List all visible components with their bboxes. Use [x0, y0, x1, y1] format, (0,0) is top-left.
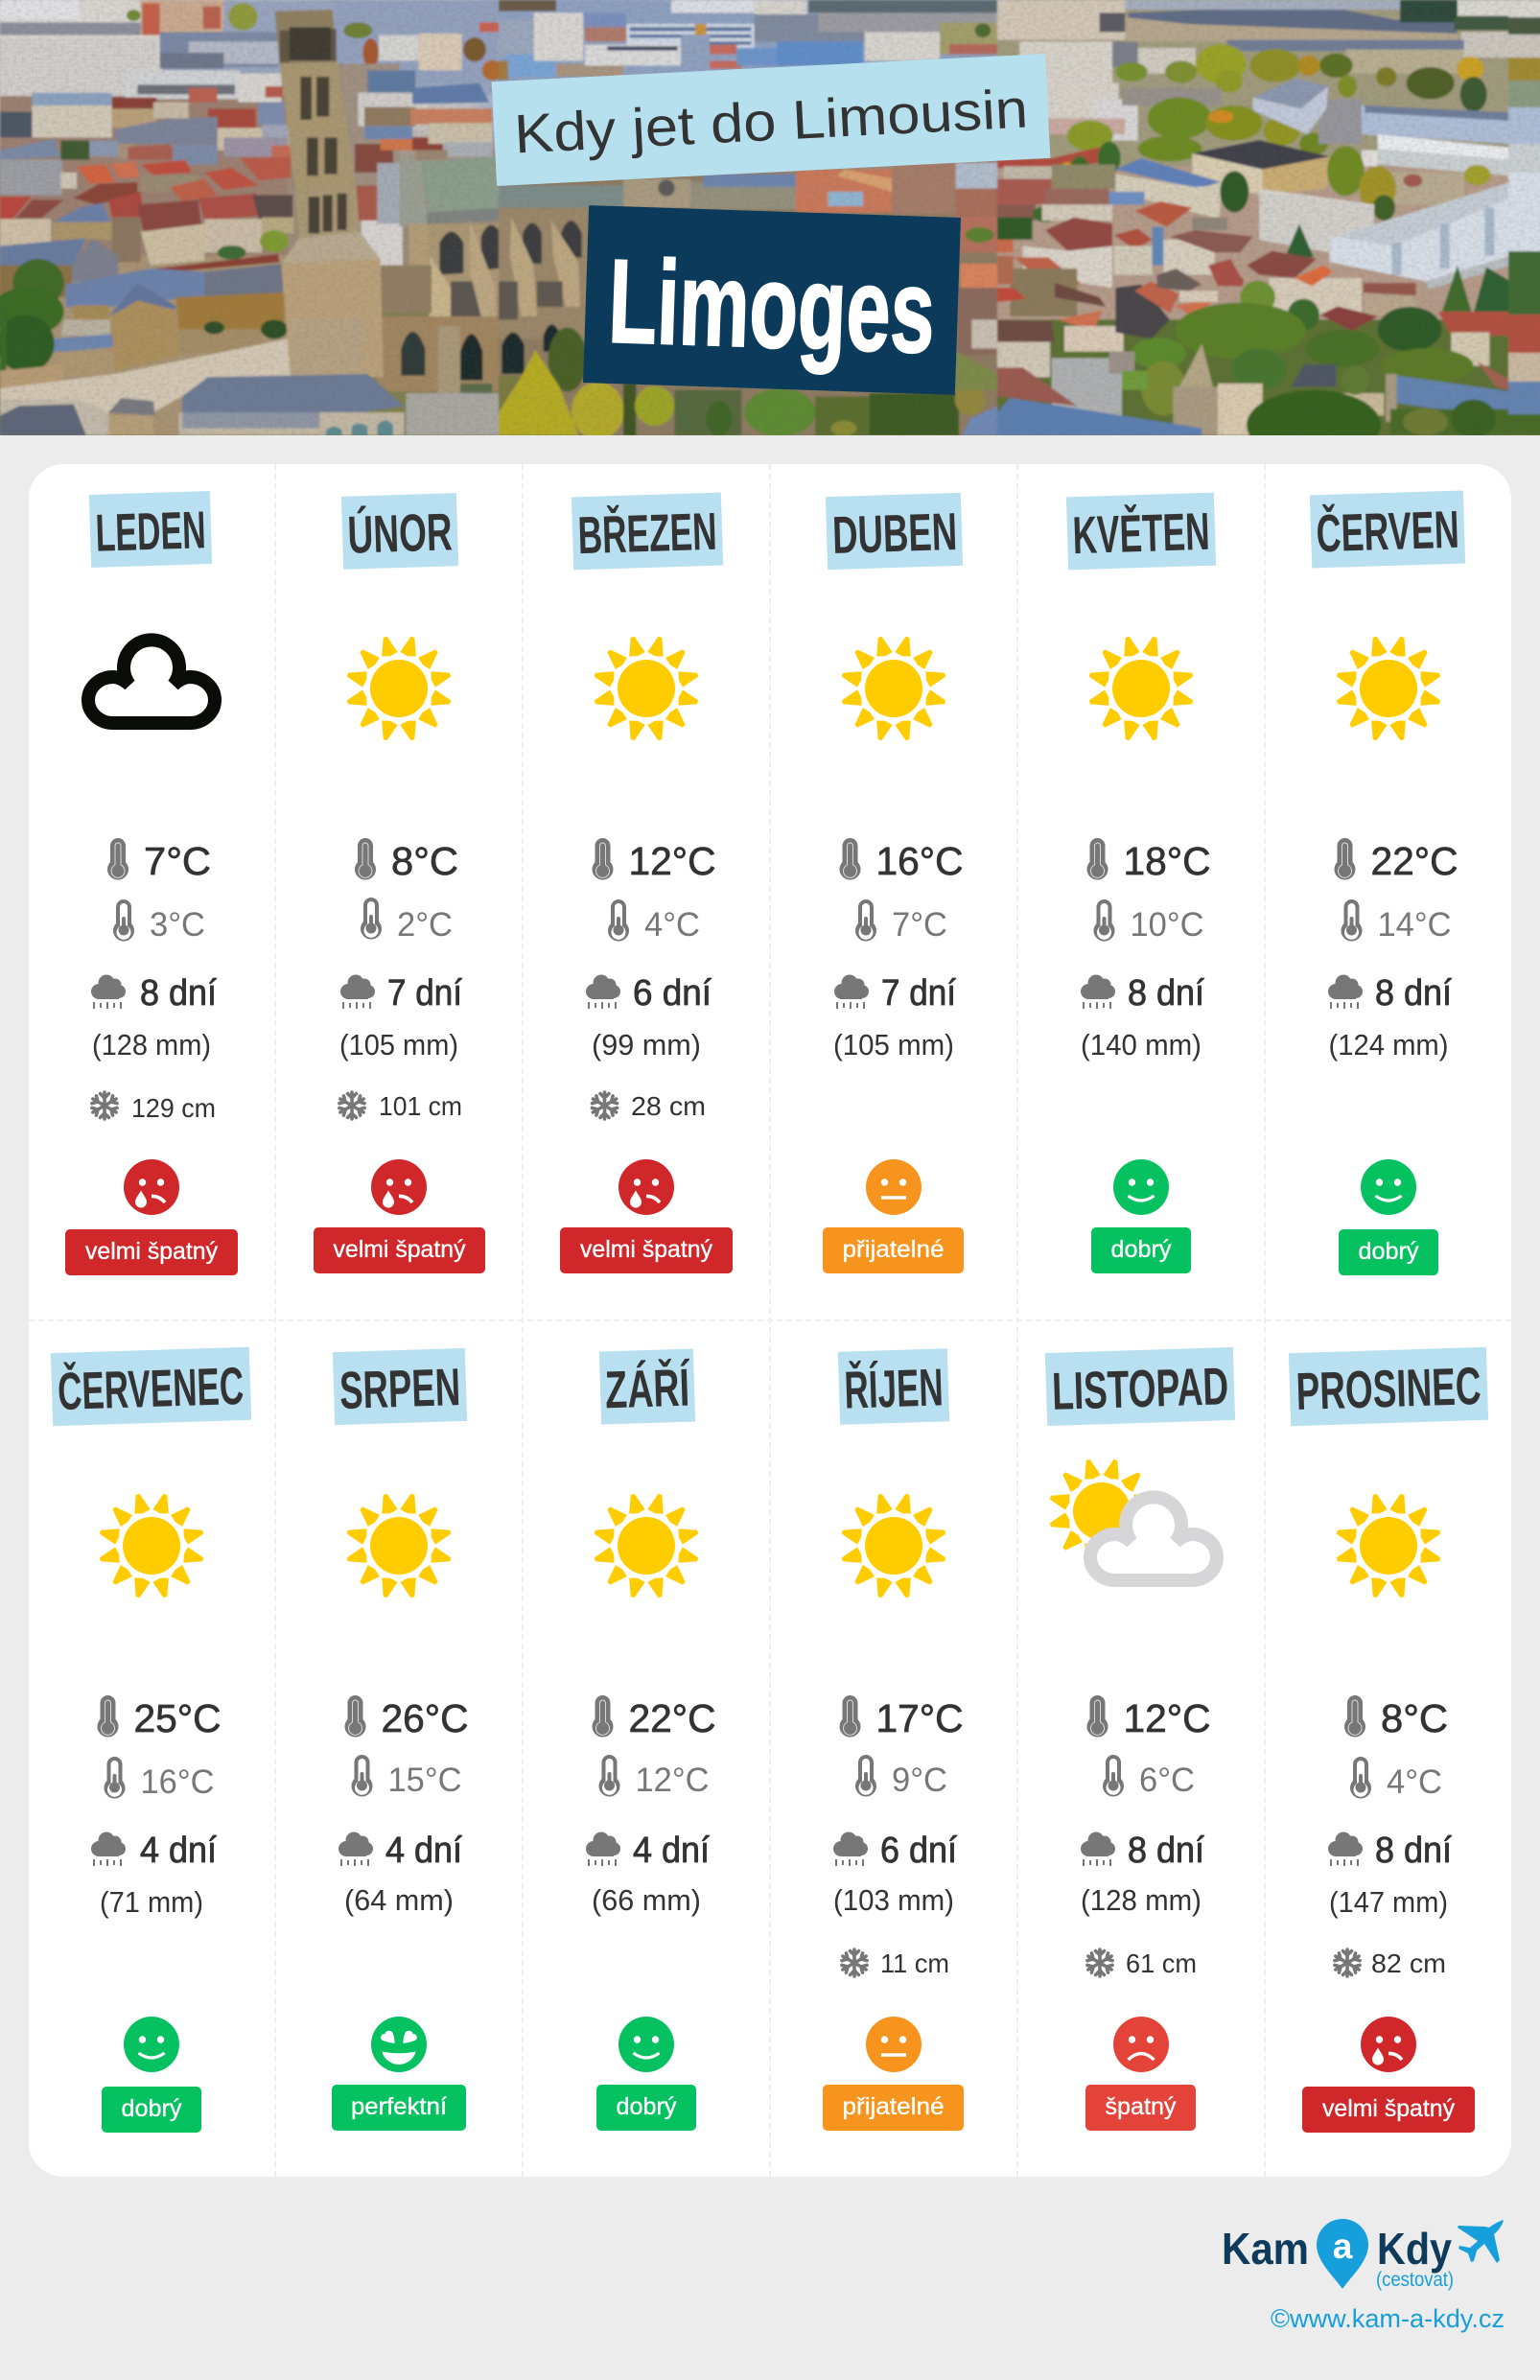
low temperature — [351, 1755, 462, 1799]
rating face — [124, 2017, 179, 2072]
website url: ©www.kam-a-kdy.cz — [1271, 2304, 1505, 2333]
month label: LEDEN — [95, 500, 207, 563]
rating face — [371, 2017, 427, 2072]
high temperature: 26°C — [382, 1696, 468, 1740]
snow: 61 cm — [1126, 1948, 1197, 1978]
snow — [338, 1091, 462, 1121]
rain days — [834, 973, 956, 1014]
high temperature: 17°C — [876, 1696, 963, 1740]
low temperature: 15°C — [387, 1762, 462, 1799]
rating badge — [1339, 1229, 1438, 1275]
high temperature — [593, 838, 715, 883]
month label — [1289, 1347, 1488, 1426]
rain days: 6 dní — [633, 973, 712, 1014]
high temperature: 12°C — [629, 839, 715, 883]
snow — [591, 1091, 706, 1121]
high temperature — [355, 838, 458, 883]
rain days: 4 dní — [385, 1831, 462, 1871]
low temperature — [608, 899, 700, 944]
precipitation: (99 mm) — [592, 1028, 701, 1062]
rating face — [1113, 2017, 1169, 2072]
low temperature: 2°C — [397, 906, 453, 944]
icon: sun — [1335, 635, 1442, 742]
icon: map pin — [1317, 2219, 1368, 2289]
logo word: Kam: Kam — [1222, 2224, 1309, 2274]
rating badge — [823, 1227, 964, 1273]
month label — [1066, 493, 1216, 570]
high temperature — [1087, 838, 1210, 883]
rating badge: dobrý — [121, 2095, 182, 2122]
rain days — [1328, 1831, 1452, 1871]
rating badge: velmi špatný — [334, 1236, 466, 1263]
low temperature — [1093, 899, 1204, 944]
rain days — [338, 1831, 462, 1871]
rain days — [586, 973, 712, 1014]
title banner: Kdy jet do Limousin: Kdy jet do Limousin — [513, 78, 1029, 166]
month label — [572, 493, 723, 570]
precipitation: (103 mm) — [833, 1883, 954, 1917]
rain days: 4 dní — [633, 1831, 710, 1871]
icon: sun — [1335, 1492, 1442, 1599]
month label — [89, 491, 212, 568]
month label — [51, 1347, 251, 1426]
rain days: 8 dní — [1128, 973, 1204, 1014]
icon: airplane — [1458, 2220, 1504, 2263]
low temperature — [598, 1755, 710, 1799]
rating badge: dobrý — [1358, 1238, 1419, 1265]
month label: ÚNOR — [347, 502, 454, 565]
month label — [838, 1348, 949, 1425]
icon: sun — [98, 1492, 205, 1599]
rating badge — [332, 2085, 466, 2131]
precipitation: (140 mm) — [1081, 1028, 1202, 1062]
high temperature — [345, 1695, 468, 1740]
rating badge: dobrý — [616, 2093, 677, 2120]
low temperature — [855, 1755, 947, 1799]
high temperature — [1335, 838, 1458, 883]
rating face — [1361, 1159, 1416, 1215]
rating badge: velmi špatný — [580, 1236, 712, 1263]
month: unor — [314, 493, 485, 1273]
low temperature: 14°C — [1377, 906, 1452, 944]
snow — [1334, 1948, 1446, 1978]
precipitation: (71 mm) — [100, 1885, 203, 1919]
icon: sun — [345, 635, 453, 742]
month: leden — [65, 491, 238, 1275]
rain days: 4 dní — [140, 1831, 217, 1871]
snow: 82 cm — [1371, 1948, 1446, 1978]
month label — [599, 1348, 695, 1425]
precipitation: (105 mm) — [339, 1028, 458, 1062]
icon: sun — [593, 1492, 700, 1599]
precipitation: (128 mm) — [92, 1028, 211, 1062]
snow — [1086, 1948, 1197, 1978]
high temperature: 18°C — [1124, 839, 1210, 883]
rating badge — [1091, 1227, 1191, 1273]
precipitation: (105 mm) — [833, 1028, 954, 1062]
low temperature — [855, 899, 947, 944]
precipitation: (66 mm) — [592, 1883, 701, 1917]
low temperature: 7°C — [892, 906, 947, 944]
logo: Kam a Kdy — [1222, 2219, 1505, 2333]
snow — [841, 1948, 949, 1978]
precipitation: (124 mm) — [1329, 1028, 1448, 1062]
month label: ČERVENEC — [57, 1356, 245, 1421]
rating face — [124, 1159, 179, 1215]
month label — [333, 1348, 467, 1425]
low temperature — [1350, 1757, 1442, 1801]
title banner: Kdy jet do Limousin — [492, 54, 1050, 186]
city banner: Limoges: Limoges — [607, 235, 937, 379]
low temperature — [104, 1757, 215, 1801]
rating badge: přijatelné — [842, 2093, 944, 2120]
month: zari — [586, 1348, 715, 2131]
header photo: aerial view of Limoges — [0, 0, 1540, 479]
rating badge: přijatelné — [842, 1236, 944, 1263]
rain days: 7 dní — [881, 973, 956, 1014]
month label: DUBEN — [831, 502, 958, 565]
rain days: 7 dní — [387, 973, 462, 1014]
high temperature: 22°C — [1371, 839, 1458, 883]
rain days: 8 dní — [1375, 973, 1452, 1014]
rating badge: velmi špatný — [1322, 2095, 1455, 2122]
low temperature: 4°C — [1387, 1763, 1442, 1801]
month: brezen — [560, 493, 733, 1273]
rating face — [1113, 1159, 1169, 1215]
snow: 101 cm — [379, 1091, 462, 1121]
month: kveten — [1066, 493, 1216, 1273]
icon: sun — [840, 1492, 947, 1599]
low temperature — [1103, 1755, 1195, 1799]
rain days — [91, 973, 217, 1014]
high temperature: 7°C — [144, 839, 211, 883]
month label: ZÁŘÍ — [604, 1358, 691, 1419]
rating badge — [823, 2085, 964, 2131]
month: srpen — [332, 1348, 468, 2131]
low temperature: 4°C — [644, 906, 700, 944]
precipitation: (128 mm) — [1081, 1883, 1202, 1917]
low temperature: 6°C — [1139, 1762, 1195, 1799]
high temperature — [107, 838, 211, 883]
rain days: 8 dní — [1375, 1831, 1452, 1871]
rating badge — [102, 2087, 201, 2133]
month: cervenec — [51, 1347, 251, 2133]
rating badge: špatný — [1105, 2093, 1177, 2120]
high temperature — [1087, 1695, 1210, 1740]
logo subtitle: (cestovat) — [1376, 2269, 1454, 2291]
icon: map pin: a — [1333, 2227, 1353, 2266]
snow: 28 cm — [631, 1091, 706, 1121]
month label: ČERVEN — [1316, 500, 1459, 563]
high temperature — [840, 1695, 963, 1740]
high temperature — [840, 838, 963, 883]
icon: sun — [593, 635, 700, 742]
rating face — [371, 1159, 427, 1215]
month: listopad — [1045, 1347, 1235, 2131]
rain days — [586, 1831, 710, 1871]
high temperature: 22°C — [629, 1696, 715, 1740]
high temperature: 16°C — [876, 839, 963, 883]
month label: BŘEZEN — [577, 502, 718, 565]
icon: cloud — [88, 640, 215, 723]
precipitation: (64 mm) — [344, 1883, 454, 1917]
rating badge: dobrý — [1110, 1236, 1172, 1263]
low temperature — [361, 898, 453, 944]
snow: 11 cm — [880, 1948, 949, 1978]
snow — [91, 1092, 216, 1123]
icon: sun — [1087, 635, 1195, 742]
low temperature: 16°C — [140, 1763, 215, 1801]
low temperature: 3°C — [150, 906, 205, 944]
months panel — [29, 464, 1511, 2177]
rating badge — [65, 1229, 238, 1275]
month label: SRPEN — [338, 1357, 461, 1420]
rain days — [91, 1831, 217, 1871]
high temperature: 12°C — [1124, 1696, 1210, 1740]
high temperature: 8°C — [391, 839, 458, 883]
city banner: Limoges — [583, 205, 961, 395]
rain days: 6 dní — [880, 1831, 957, 1871]
high temperature — [98, 1695, 221, 1740]
month label — [1045, 1347, 1235, 1426]
rain days — [1081, 1831, 1204, 1871]
low temperature — [1341, 899, 1452, 944]
low temperature: 9°C — [892, 1762, 947, 1799]
rating badge: velmi špatný — [85, 1238, 218, 1265]
low temperature — [113, 899, 205, 944]
rain days — [1081, 973, 1204, 1014]
low temperature: 10°C — [1130, 906, 1204, 944]
month label: KVĚTEN — [1072, 502, 1211, 565]
rain days — [1328, 973, 1452, 1014]
rating face — [866, 2017, 922, 2072]
rating face — [1361, 2017, 1416, 2072]
month label: LISTOPAD — [1051, 1356, 1229, 1421]
month label: ŘÍJEN — [844, 1357, 945, 1420]
rating face — [618, 2017, 674, 2072]
month label — [341, 493, 458, 570]
rating badge — [596, 2085, 696, 2131]
grid dividers — [29, 464, 1511, 2177]
low temperature: 12°C — [635, 1762, 710, 1799]
month: prosinec — [1289, 1347, 1488, 2133]
high temperature: 25°C — [134, 1696, 221, 1740]
month: duben — [823, 493, 964, 1273]
snow: 129 cm — [131, 1093, 216, 1123]
high temperature — [593, 1695, 715, 1740]
rain days — [340, 973, 462, 1014]
rating badge: perfektní — [351, 2093, 447, 2120]
rain days: 8 dní — [1128, 1831, 1204, 1871]
logo word: Kdy: Kdy — [1377, 2224, 1452, 2274]
rain days — [833, 1831, 957, 1871]
rating face — [866, 1159, 922, 1215]
month: rijen — [823, 1348, 964, 2131]
rating badge — [1302, 2087, 1475, 2133]
month: cerven — [1310, 491, 1465, 1275]
high temperature — [1344, 1695, 1448, 1740]
month label — [1310, 491, 1465, 568]
icon: sun — [345, 1492, 453, 1599]
rating badge — [1085, 2085, 1196, 2131]
rating badge — [560, 1227, 733, 1273]
icon: sun behind cloud — [1048, 1458, 1217, 1580]
high temperature: 8°C — [1381, 1696, 1448, 1740]
rating badge — [314, 1227, 485, 1273]
rain days: 8 dní — [140, 973, 217, 1014]
precipitation: (147 mm) — [1329, 1885, 1448, 1919]
icon: sun — [840, 635, 947, 742]
month label — [826, 493, 963, 570]
rating face — [618, 1159, 674, 1215]
